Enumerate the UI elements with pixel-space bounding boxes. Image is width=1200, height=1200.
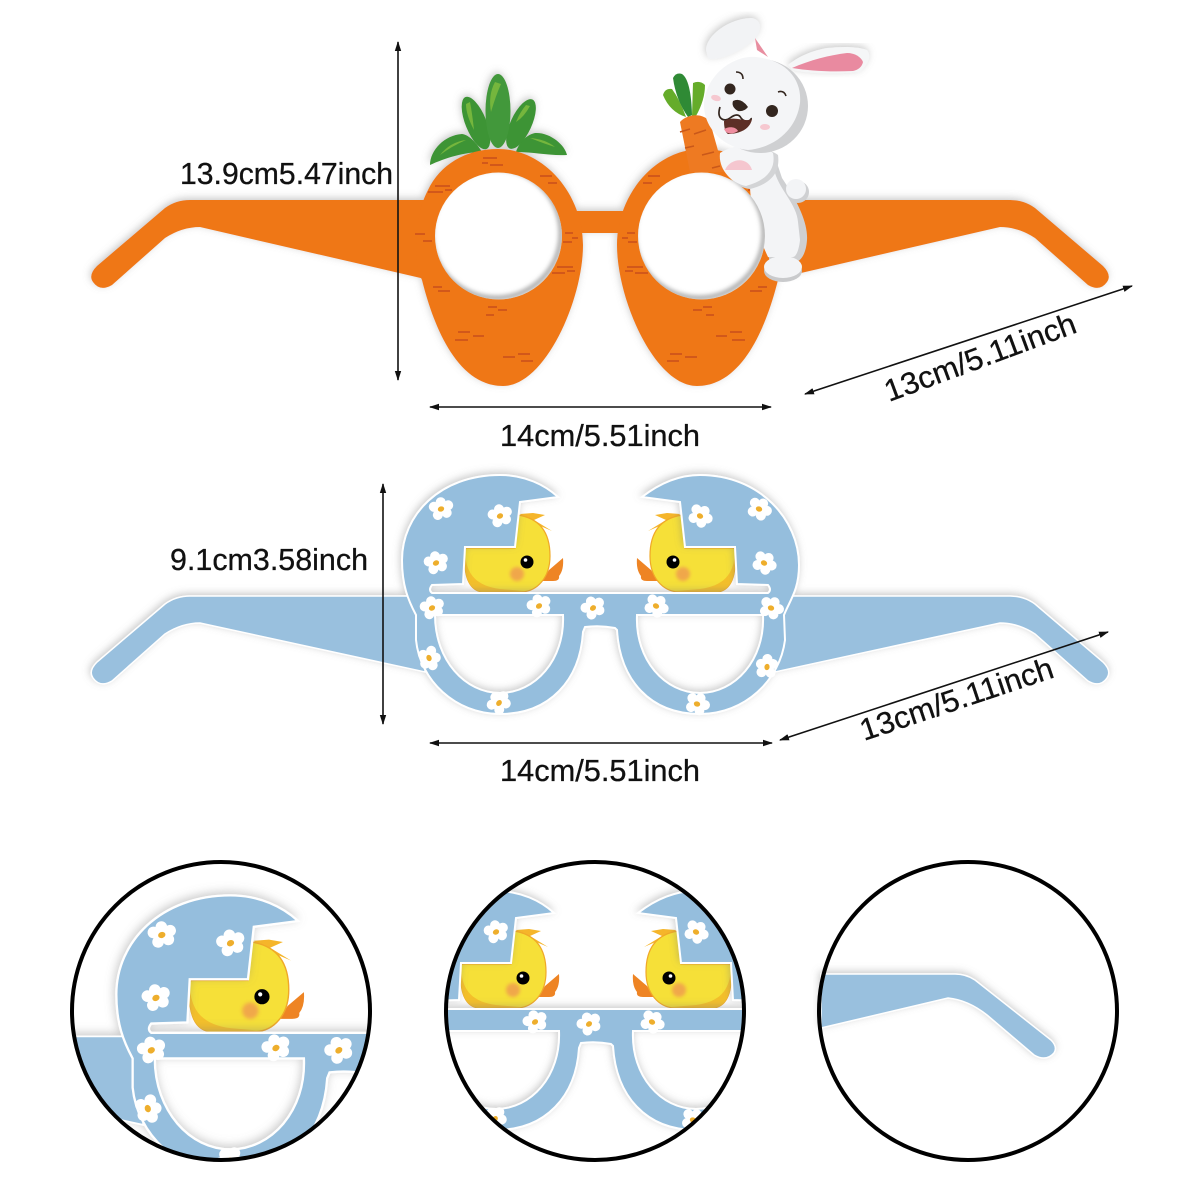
left carrot frame — [416, 149, 583, 386]
egg frame with lens openings — [402, 475, 799, 714]
left blue temple — [91, 596, 425, 684]
carrot width label: 14cm/5.51inch — [500, 419, 700, 453]
carrot height arrow — [397, 42, 399, 380]
carrot height label: 13.9cm5.47inch — [180, 157, 393, 191]
detail circle: egg frame close-up — [70, 860, 372, 1162]
carrot frame with temples, leaves and bridge — [91, 74, 1109, 386]
carrot glasses — [91, 18, 1109, 386]
carrot temple arrow — [805, 286, 1132, 394]
left lens opening — [431, 168, 562, 300]
bunny mascot — [663, 18, 869, 282]
blue frame with temples — [91, 475, 1109, 714]
duck glasses — [91, 475, 1109, 718]
duck width label: 14cm/5.51inch — [500, 754, 700, 788]
right temple — [775, 200, 1109, 288]
duck temple arrow — [780, 632, 1108, 740]
detail circle: ducks and bridge close-up — [444, 860, 746, 1162]
left carrot surface marks — [415, 158, 578, 361]
left carrot leaves — [430, 74, 567, 165]
left duck — [465, 513, 563, 592]
daisy pattern — [415, 494, 787, 718]
duck temple label: 13cm/5.11inch — [855, 651, 1058, 748]
right lens opening — [634, 168, 766, 300]
right duck — [637, 513, 735, 592]
carrot held by bunny — [663, 74, 724, 172]
duck height arrow — [382, 484, 384, 724]
left temple — [91, 200, 425, 288]
right carrot surface marks — [622, 158, 785, 361]
duck height label: 9.1cm3.58inch — [170, 543, 368, 577]
carrot width arrow — [430, 406, 771, 408]
bridge — [570, 211, 630, 233]
carrot temple label: 13cm/5.11inch — [880, 307, 1081, 409]
right blue temple — [775, 596, 1109, 684]
right carrot frame — [617, 149, 784, 386]
duck width arrow — [430, 742, 772, 744]
detail circle: temple tip close-up — [819, 862, 1117, 1160]
